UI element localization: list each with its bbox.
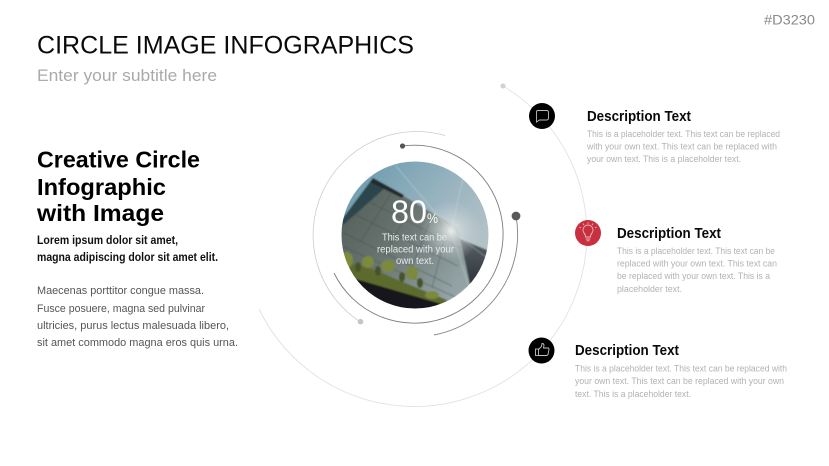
description block 2: Description Text xyxy=(617,226,721,242)
bold lead text: Lorem ipsum dolor sit amet, xyxy=(37,235,178,247)
description block 3: Description Text xyxy=(575,343,679,359)
outer arc with dot xyxy=(259,84,587,406)
foliage xyxy=(349,264,448,304)
description block 3: your own text. This text can be replaced with your own xyxy=(575,376,784,386)
description block 2: replaced with your own text. This text can xyxy=(617,258,777,268)
dark arc with dot xyxy=(334,143,503,323)
right arc with dot xyxy=(434,212,520,335)
light arc with dot xyxy=(313,132,445,325)
description block 1 xyxy=(586,109,780,164)
left heading xyxy=(36,146,200,226)
dark base xyxy=(356,278,442,308)
left heading: Infographic xyxy=(37,174,166,200)
product code: #D3230 xyxy=(764,12,815,28)
description block 2: This is a placeholder text. This text can be xyxy=(617,246,775,256)
title: CIRCLE IMAGE INFOGRAPHICS xyxy=(37,32,414,60)
center metric: % xyxy=(427,211,438,226)
left heading: Creative Circle xyxy=(37,146,200,172)
circular photo xyxy=(340,160,492,312)
description block 2: placeholder text. xyxy=(617,284,682,294)
center caption: own text. xyxy=(396,256,434,267)
center caption xyxy=(377,232,455,267)
description block 1: This is a placeholder text. This text can be replaced xyxy=(587,129,780,139)
description block 2 xyxy=(617,226,777,294)
center caption: replaced with your xyxy=(377,244,455,256)
body paragraph: ultricies, purus lectus malesuada libero, xyxy=(37,320,229,332)
body paragraph xyxy=(37,285,238,349)
description block 1: your own text. This is a placeholder text. xyxy=(587,154,741,164)
description block 1: Description Text xyxy=(587,109,691,125)
icon: speech bubble xyxy=(529,103,555,129)
facade xyxy=(342,188,470,302)
description block 3 xyxy=(575,343,787,399)
bold lead text: magna adipiscing dolor sit amet elit. xyxy=(37,252,218,264)
bold lead text xyxy=(37,235,218,264)
left heading: with Image xyxy=(36,200,164,226)
center caption: This text can be xyxy=(382,232,447,244)
description block 3: text. This is a placeholder text. xyxy=(575,389,691,399)
icon: light bulb xyxy=(575,220,601,246)
description block 2: be replaced with your own text. This is a xyxy=(617,271,770,281)
sun flare xyxy=(424,206,474,258)
body paragraph: Maecenas porttitor congue massa. xyxy=(37,285,204,297)
subtitle: Enter your subtitle here xyxy=(37,66,217,85)
tower xyxy=(460,239,487,286)
left text panel xyxy=(36,146,238,349)
description block 1: with your own text. This text can be replaced with xyxy=(586,142,777,152)
body paragraph: Fusce posuere, magna sed pulvinar xyxy=(37,303,205,315)
center metric: 80 xyxy=(391,194,427,230)
body paragraph: sit amet commodo magna eros quis urna. xyxy=(37,337,238,349)
description block 3: This is a placeholder text. This text can be replaced with xyxy=(575,364,787,374)
icon: thumbs up xyxy=(528,338,554,364)
